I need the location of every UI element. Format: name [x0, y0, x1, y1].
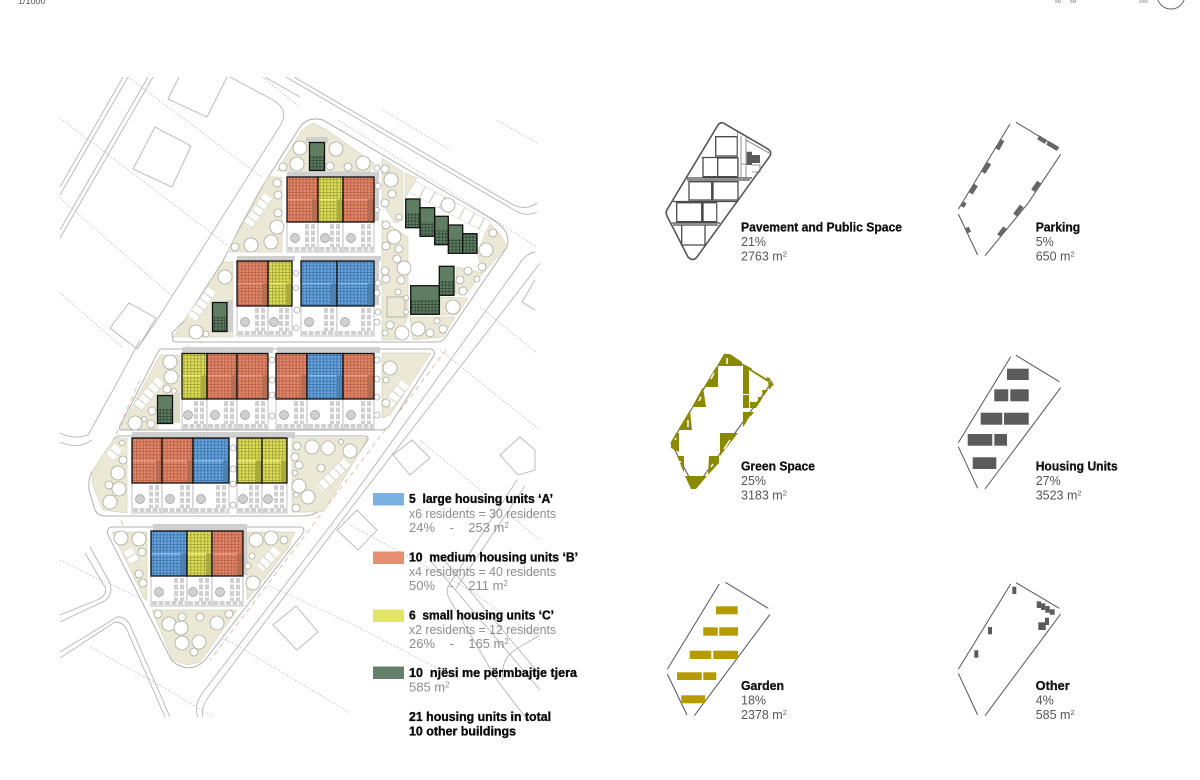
label: garden [741, 679, 787, 722]
label: green space: 3183 m [741, 488, 783, 502]
legend item: medium units B [373, 550, 578, 593]
label: housing units: 2 [1077, 488, 1082, 498]
label: pavement: 2763 m [741, 250, 783, 264]
other buildings [158, 137, 477, 424]
legend item: large units A [373, 491, 556, 535]
label: other: 585 m [1036, 708, 1070, 722]
label: pavement: Pavement and Public Space [741, 220, 902, 234]
legend totals: 10 other buildings [409, 724, 516, 738]
label: parking: 2 [1070, 250, 1075, 258]
legend item: large units A: 5 large housing units ‘A’ [409, 491, 553, 506]
label: green space [741, 460, 815, 502]
legend totals [409, 709, 551, 738]
diagram: green space [671, 354, 774, 489]
site plan map [60, 77, 541, 717]
diagram: parking [958, 122, 1061, 256]
header: north circle [1157, 0, 1185, 9]
diagram: housing units [958, 355, 1061, 489]
legend item: medium units B: x4 residents = 40 residents [409, 564, 556, 579]
label: other: 4% [1036, 694, 1054, 708]
surrounding roads and plots [60, 77, 541, 717]
panel: garden [667, 582, 787, 722]
label: parking [1036, 220, 1080, 264]
label: garden: 2378 m [741, 708, 783, 722]
trees [103, 141, 497, 656]
legend item: small units C: 26% - 165 m [409, 636, 504, 651]
diagram: pavement outline [666, 123, 771, 259]
pale dashed site line [112, 345, 446, 660]
legend item: medium units B: 2 [503, 579, 508, 588]
label: garden: 18% [741, 694, 766, 708]
panel: housing units [958, 355, 1118, 502]
label: green space: 25% [741, 474, 766, 488]
diagram: other [958, 583, 1061, 716]
panel: pavement and public space [666, 123, 902, 263]
legend item: medium units B: 10 medium housing units ‘B’ [409, 550, 578, 564]
label: housing units: 27% [1036, 474, 1061, 488]
green land patches [92, 123, 507, 665]
legend item: small units C [373, 608, 556, 651]
label: other: 2 [1070, 708, 1075, 717]
label: pavement: 2 [783, 250, 787, 258]
housing units [132, 177, 374, 576]
legend item: other units [373, 665, 578, 694]
row shadows [132, 172, 381, 575]
label: garden: 2 [783, 708, 787, 717]
legend item: other units: 585 m [409, 680, 445, 694]
label: housing units: 3523 m [1036, 488, 1077, 502]
label: pavement: 21% [741, 235, 766, 249]
legend item: small units C: 2 [504, 637, 509, 646]
label: green space: 2 [783, 488, 787, 498]
legend item: large units A: x6 residents = 30 residents [409, 506, 556, 521]
label: parking: Parking [1036, 220, 1080, 234]
legend item: small units C: 6 small housing units ‘C’ [409, 608, 554, 622]
label: parking: 650 m [1036, 250, 1070, 264]
parking strips [110, 187, 488, 568]
label: housing units [1036, 460, 1118, 502]
legend item: small units C: x2 residents = 12 residents [409, 622, 556, 637]
legend totals: 21 housing units in total [409, 709, 551, 724]
legend item: other units: 2 [445, 680, 450, 690]
label: other [1036, 679, 1075, 722]
label: green space: Green Space [741, 460, 815, 474]
panel: parking [958, 122, 1080, 264]
header: scale bar labels [1055, 0, 1148, 4]
street block outlines [89, 119, 508, 668]
label: other: Other [1036, 679, 1070, 693]
diagram: garden [667, 582, 770, 716]
private gardens [132, 222, 374, 606]
legend item: other units: 10 njësi me përmbajtje tjera [409, 665, 578, 680]
label: housing units: Housing Units [1036, 460, 1118, 474]
panel: green space [671, 354, 815, 502]
label: pavement [741, 220, 902, 264]
label: garden: Garden [741, 679, 784, 693]
panel: other [958, 583, 1075, 722]
legend item: large units A: 2 [504, 521, 509, 530]
legend [373, 491, 578, 738]
legend item: medium units B: 50% - 211 m [409, 578, 503, 593]
legend item: large units A: 24% - 253 m [409, 520, 504, 535]
label: parking: 5% [1036, 235, 1054, 249]
